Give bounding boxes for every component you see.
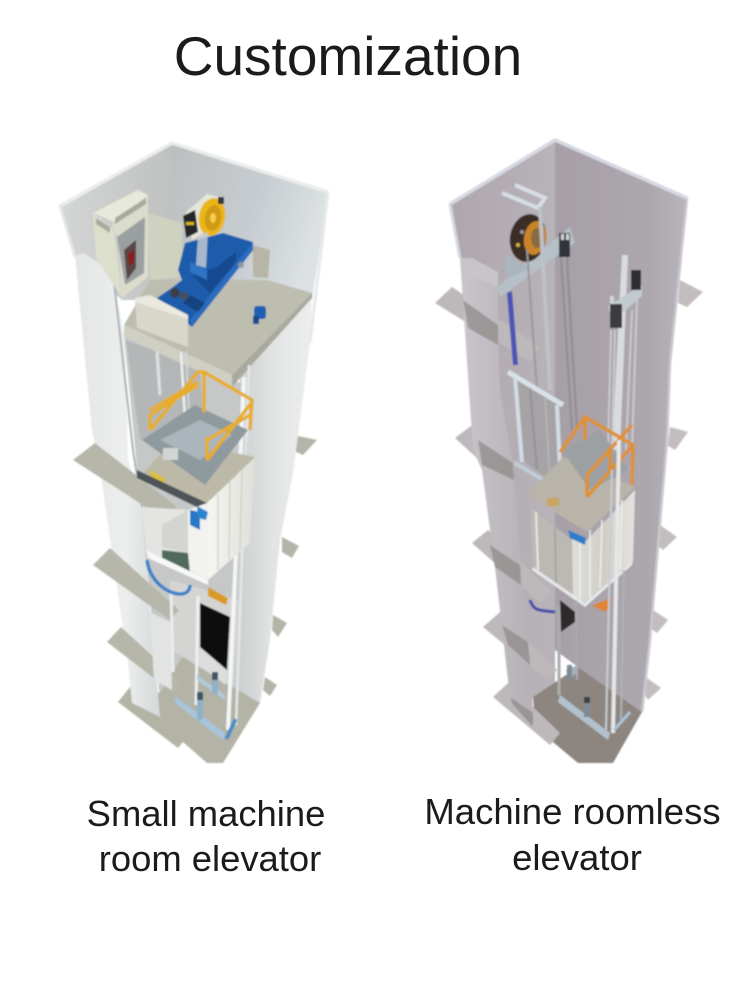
machine room slab <box>124 280 312 387</box>
elevator car <box>142 458 255 585</box>
wall top rim <box>450 140 687 204</box>
landing slab 2 <box>93 548 179 620</box>
governor <box>253 306 266 324</box>
right rear wall <box>555 140 687 712</box>
title: Customization <box>174 25 522 87</box>
landing slab 3 <box>107 627 182 693</box>
travelling cable <box>147 560 190 594</box>
left rear wall <box>450 140 555 700</box>
machine beam <box>497 227 575 297</box>
front left wall pillar <box>75 253 160 717</box>
front left wall pillar <box>460 258 533 727</box>
pit buffers <box>558 665 630 740</box>
right wall tabs <box>645 280 703 700</box>
slab bands through pillar <box>463 300 533 727</box>
caption: small machine room elevator: room elevator <box>99 838 321 879</box>
traction machine base <box>157 233 270 327</box>
traction motor <box>183 194 228 268</box>
caption: machine roomless elevator: elevator <box>512 837 642 878</box>
illustration: small machine room elevator shaft <box>60 143 328 763</box>
wall top rim <box>60 143 328 206</box>
left rear wall <box>60 143 172 300</box>
elevator car body <box>530 490 635 612</box>
counterweight <box>196 587 230 705</box>
lower right wall <box>232 296 312 740</box>
yellow car top railing <box>150 372 252 460</box>
caption: machine roomless elevator: Machine roomless <box>424 791 721 832</box>
upper rope hitch <box>559 233 577 430</box>
landing slab 1 <box>73 443 177 518</box>
caption: small machine room elevator: Small machine <box>87 793 325 834</box>
hoistway interior <box>124 335 245 745</box>
suspension ropes and guide rails <box>157 352 256 730</box>
caption: machine roomless elevator <box>424 791 721 878</box>
pit floor <box>533 667 642 763</box>
landing slabs and right wall tabs <box>263 435 317 696</box>
counterweight lower <box>560 600 575 632</box>
pit buffers <box>174 672 237 740</box>
gearless traction motor <box>506 211 550 265</box>
top frame and rail <box>502 185 550 390</box>
counterweight frame <box>508 372 588 507</box>
car top equipment <box>137 405 255 512</box>
caption: small machine room elevator <box>87 793 325 879</box>
landing slabs <box>435 287 560 745</box>
openings <box>150 612 172 690</box>
compensating blue strip <box>507 291 518 365</box>
main rails <box>559 440 624 733</box>
parapet wall <box>135 295 188 347</box>
pit floor <box>118 657 260 763</box>
right rear wall <box>172 143 328 300</box>
car guide rail and rope hitch <box>608 255 642 450</box>
car top and orange railing <box>527 417 635 532</box>
illustration: machine roomless elevator shaft <box>435 140 703 763</box>
control cabinet <box>93 190 182 298</box>
